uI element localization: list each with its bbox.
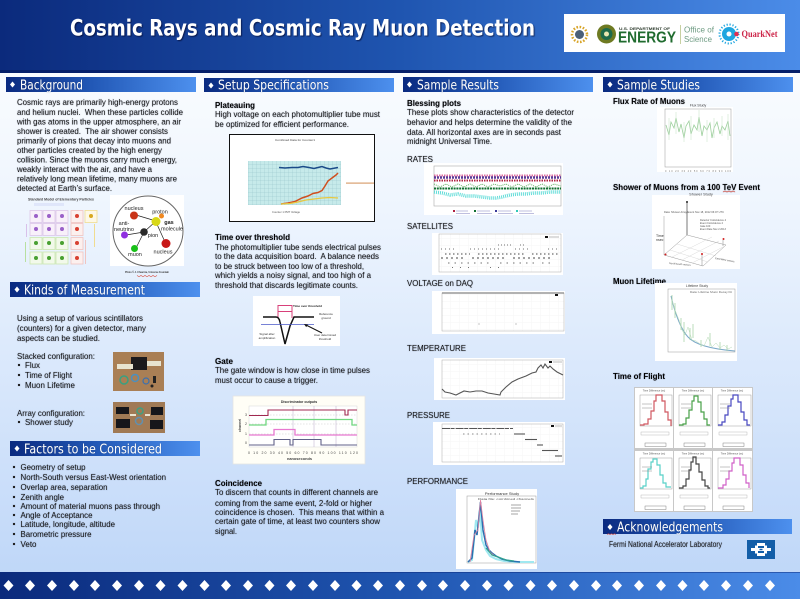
diagram: cosmic ray air shower collision: muon — [128, 252, 142, 258]
text: coincidence: certain gate of time, at least two counters show — [215, 516, 381, 526]
text: background paragraph: shower is created. The air shower consists — [17, 126, 169, 136]
diagram: time over threshold pulse: Signal after — [259, 332, 275, 336]
chart: performance study: Data file: combined channels — [478, 498, 535, 501]
footer band with diamonds — [0, 572, 800, 599]
diagram: cosmic ray air shower collision: anti- — [119, 221, 130, 227]
heading: Acknowledgements: Acknowledgements — [617, 520, 723, 536]
diagram: cosmic ray air shower collision: nucleus — [154, 250, 173, 256]
chart: shower study — [652, 192, 740, 269]
list: factors: Latitude, longitude, altitude — [20, 519, 115, 529]
list: stacked configuration: Time of Flight — [25, 370, 73, 380]
Department of Energy wordmark: U.S. DEPARTMENT OF — [619, 26, 671, 31]
chart: shower study: Detector Coincidence 4 — [700, 219, 727, 222]
title: Cosmic Rays and Cosmic Ray Muon Detection — [70, 16, 535, 42]
logo strip — [564, 14, 785, 52]
text: kinds intro — [17, 313, 147, 343]
histogram: cyan channel: Time Difference (ns) — [643, 452, 665, 456]
panel: kinds of measurement — [10, 282, 200, 433]
chart: flux study: Flux Study — [690, 104, 707, 108]
heading: Factors to be Considered: Factors to be Considered — [24, 442, 162, 458]
text: time over threshold: to the data acquisition board. A balance needs — [215, 251, 380, 261]
text: coincidence: To discern that counts in different channels are — [215, 487, 378, 497]
QuarkNet wordmark: QuarkNet — [742, 29, 778, 39]
histogram: green channel: Time Difference (ns) — [682, 390, 704, 392]
diagram: time over threshold pulse: Time over threshold — [293, 304, 322, 308]
heading: Sample Results: Sample Results — [417, 78, 499, 94]
text: background paragraph: collision. Since the muons carry much energy, — [17, 154, 177, 164]
icon: QuarkNet star — [720, 24, 739, 44]
diagram: time over threshold pulse: threshold — [319, 337, 332, 341]
text: blessing plots — [407, 98, 574, 146]
text: background paragraph: other particles created by the high energy — [17, 145, 163, 155]
chart: discriminator outputs: 1 — [245, 432, 247, 436]
diagram: cosmic ray air shower collision: molecule — [161, 226, 183, 232]
text: background paragraph: weakly interact with the air, and have a — [16, 164, 152, 174]
chart: discriminator outputs: 0 10 20 30 40 50 60 70 80 90 100 110 120 — [248, 451, 358, 455]
histogram: red channel: Time Difference (ns) — [643, 390, 665, 392]
text: gate — [215, 356, 371, 385]
text: blessing plots: midnight Universal Time. — [407, 136, 492, 146]
list: factors: Zenith angle — [20, 492, 64, 502]
text: coincidence — [215, 478, 384, 536]
histogram: black channel: Time Difference (ns) — [682, 452, 704, 456]
chart: discriminator outputs — [233, 396, 365, 464]
text: kinds intro: Using a setup of various scintillators — [17, 313, 144, 323]
heading: Kinds of Measurement: Kinds of Measurement — [24, 282, 145, 298]
list: array configuration: Array configuration: — [17, 408, 85, 418]
chart: pressure — [433, 422, 565, 465]
chart: plateau curves: Combined Data for Counter1 — [275, 138, 315, 142]
heading: Background — [6, 77, 196, 94]
chart: discriminator outputs: 0 — [245, 441, 247, 445]
Office of Science wordmark: Science — [684, 35, 713, 44]
heading: Background: Background — [20, 78, 83, 94]
diagram: time over threshold pulse: ground — [321, 316, 331, 320]
list: stacked configuration: Flux — [25, 360, 41, 370]
chart grid: time of flight histograms — [634, 387, 753, 512]
chart: shower study: Time — [656, 234, 664, 238]
chart: standard model of elementary particles: Standard Model of Elementary Particles — [28, 198, 94, 202]
panel: sample studies — [603, 77, 793, 512]
chart: shower study: Gate 100 — [700, 225, 711, 228]
heading: Setup Specifications: Setup Specifications — [218, 78, 329, 94]
chart: shower study: Data: Shower Array Event Nov 18, 2012 06:07 UTC — [664, 211, 724, 214]
list: array configuration: Shower study — [25, 417, 74, 427]
text: gate: must occur to cause a trigger. — [215, 375, 318, 385]
text: plateauing: High voltage on each photomultiplier tube must — [215, 109, 381, 119]
label: pressure: PRESSURE — [407, 410, 450, 420]
chart: discriminator outputs: channel — [238, 419, 242, 432]
panel: acknowledgements — [603, 519, 792, 559]
label: performance: PERFORMANCE — [407, 476, 468, 486]
chart: lifetime study: Data: Lifetime Muon Decay Fit — [690, 291, 732, 294]
diagram: cosmic ray air shower collision: pion — [148, 233, 158, 239]
text: blessing plots: These plots show characteristics of the detector — [407, 107, 574, 117]
list: factors: Geometry of setup — [20, 462, 86, 472]
text: gate: Gate — [215, 356, 233, 366]
text: coincidence: coincidence is chosen. This means that within a — [215, 507, 384, 517]
text: time over threshold — [214, 232, 382, 290]
diagram: cosmic ray air shower collision: Photo © J. Chaurize, Universe Fountain — [125, 270, 169, 274]
text: background paragraph: Cosmic rays are primarily high-energy protons — [17, 97, 179, 107]
text: background paragraph: primarily of pions that decay into muons and — [17, 136, 171, 146]
diagram: time over threshold pulse — [253, 296, 340, 346]
text: background paragraph: detected at Earth’s surface. — [17, 183, 112, 193]
chart: discriminator outputs: nanoseconds — [287, 457, 312, 461]
list: factors: Amount of material muons pass through — [20, 501, 160, 511]
chart: shower study: Event Date Nov 2 2013 — [700, 228, 726, 231]
text: blessing plots: behavior and helps determine the validity of the — [407, 117, 572, 127]
photo: stacked configuration equipment — [113, 352, 164, 391]
text: plateauing: be optimized for efficient performance. — [215, 119, 349, 129]
chart: temperature — [434, 358, 565, 400]
text: time over threshold: threshold that discards legitimate counts. — [215, 280, 358, 290]
histogram: magenta channel: Time Difference (ns) — [721, 452, 743, 456]
list: factors: Barometric pressure — [20, 529, 92, 539]
label: rates: RATES — [407, 154, 433, 164]
list: stacked configuration — [17, 351, 95, 390]
chart: plateau curves: Counter 1 PMT Voltage — [272, 210, 300, 214]
diagram: cosmic ray air shower collision: proton — [152, 210, 168, 216]
chart: discriminator outputs: 3 — [245, 413, 247, 417]
heading: muon lifetime: Muon Lifetime — [613, 276, 666, 286]
chart: shower study: Event Coincidence 4 — [700, 222, 724, 225]
list: factors: Veto — [20, 539, 37, 549]
heading: shower of muons: Shower of Muons from a 100 TeV Event — [613, 182, 760, 192]
header banner — [0, 0, 800, 73]
text: time over threshold: The photomultiplier tube sends electrical pulses — [215, 242, 382, 252]
label: voltage on DAQ: VOLTAGE on DAQ — [407, 278, 473, 288]
text: gate: The gate window is how close in time pulses — [215, 365, 371, 375]
text: blessing plots: data. All horizontal axes are in seconds past — [407, 127, 562, 137]
chart: voltage on DAQ — [432, 291, 565, 334]
text: background paragraph — [16, 97, 183, 193]
Office of Science wordmark — [684, 26, 715, 44]
chart: discriminator outputs: 2 — [245, 422, 247, 426]
panel: background — [6, 77, 196, 277]
text: blessing plots: Blessing plots — [407, 98, 461, 108]
panel: sample results — [403, 77, 593, 569]
histogram: blue channel: Time Difference (ns) — [721, 390, 743, 392]
diagram: cosmic ray air shower collision — [110, 195, 184, 277]
chart: lifetime study: Lifetime Study — [686, 284, 708, 288]
heading: Sample Studies — [603, 77, 793, 94]
text: background paragraph: and helium nuclei. When these particles collide — [17, 107, 183, 117]
list: factors: Angle of Acceptance — [20, 510, 93, 520]
chart: shower study: East/West meters — [715, 257, 735, 264]
list: stacked configuration: Stacked configuration: — [17, 351, 95, 361]
heading: Sample Results — [403, 77, 593, 94]
chart: shower study: North/South meters — [669, 262, 692, 267]
heading: Acknowledgements — [603, 519, 792, 536]
panel: setup specifications — [204, 78, 394, 536]
text: time over threshold: to be struck between too low of a threshold, — [215, 261, 364, 271]
Office of Science wordmark: Office of — [684, 26, 715, 34]
chart: lifetime study — [655, 283, 737, 361]
chart: flux study — [657, 104, 733, 173]
heading: time of flight: Time of Flight — [613, 371, 665, 381]
chart: shower study: nsec — [656, 238, 664, 242]
chart: performance study — [456, 489, 537, 569]
chart: performance study: Performance Study — [485, 491, 519, 496]
diagram: time over threshold pulse: Reference — [319, 312, 333, 316]
chart: rates — [424, 163, 563, 215]
text: time over threshold: Time over threshold — [215, 232, 290, 242]
text: coincidence: coming from the same event, 2-fold or higher — [215, 498, 372, 508]
chart: discriminator outputs: Discriminator outputs — [281, 400, 317, 404]
Department of Energy wordmark: ENERGY — [618, 30, 677, 46]
chart: shower study: Shower Study — [689, 192, 713, 196]
diagram: cosmic ray air shower collision: nucleus — [125, 206, 144, 212]
diagram: cosmic ray air shower collision: neutrino — [114, 227, 134, 233]
chart: flux study: 0 10 20 30 40 50 60 70 80 90 100 — [665, 170, 732, 173]
list: factors — [13, 462, 166, 549]
text: kinds intro: (counters) for a given detector, many — [17, 323, 147, 333]
panel: factors to be considered — [10, 441, 200, 549]
icon: Department of Energy seal — [597, 24, 616, 44]
chart: satellites — [432, 233, 563, 275]
heading: flux rate: Flux Rate of Muons — [613, 96, 685, 106]
text: background paragraph: relatively long mean lifetime, many muons are — [17, 174, 177, 184]
text: coincidence: signal. — [215, 526, 237, 536]
heading: Sample Studies: Sample Studies — [617, 78, 700, 94]
label: satellites: SATELLITES — [407, 221, 453, 231]
chart: standard model of elementary particles — [25, 198, 97, 264]
label: temperature: TEMPERATURE — [407, 343, 466, 353]
list: factors: Overlap area, separation — [20, 482, 108, 492]
icon: Office of Science seal — [572, 27, 587, 42]
text: coincidence: Coincidence — [215, 478, 262, 488]
diagram: time over threshold pulse: amplification — [259, 336, 276, 340]
list: array configuration — [17, 408, 85, 427]
diagram: time over threshold pulse: User determined — [314, 333, 336, 337]
text: plateauing — [215, 100, 381, 129]
text: Fermilab credit: Fermi National Accelerator Laboratory — [609, 539, 723, 549]
text: background paragraph: with gas atoms in the upper atmosphere, an air — [16, 116, 181, 126]
list: factors: North-South versus East-West orientation — [20, 472, 166, 482]
diagram: cosmic ray air shower collision: gas — [164, 220, 174, 226]
text: plateauing: Plateauing — [215, 100, 255, 110]
text: kinds intro: aspects can be studied. — [17, 333, 100, 343]
list: stacked configuration: Muon Lifetime — [25, 380, 75, 390]
photo: array configuration equipment — [113, 402, 165, 433]
chart: plateau curves — [230, 134, 374, 222]
icon: Fermilab logo — [747, 540, 775, 559]
text: time over threshold: which yields a noisy signal, and too high of a — [214, 270, 371, 280]
